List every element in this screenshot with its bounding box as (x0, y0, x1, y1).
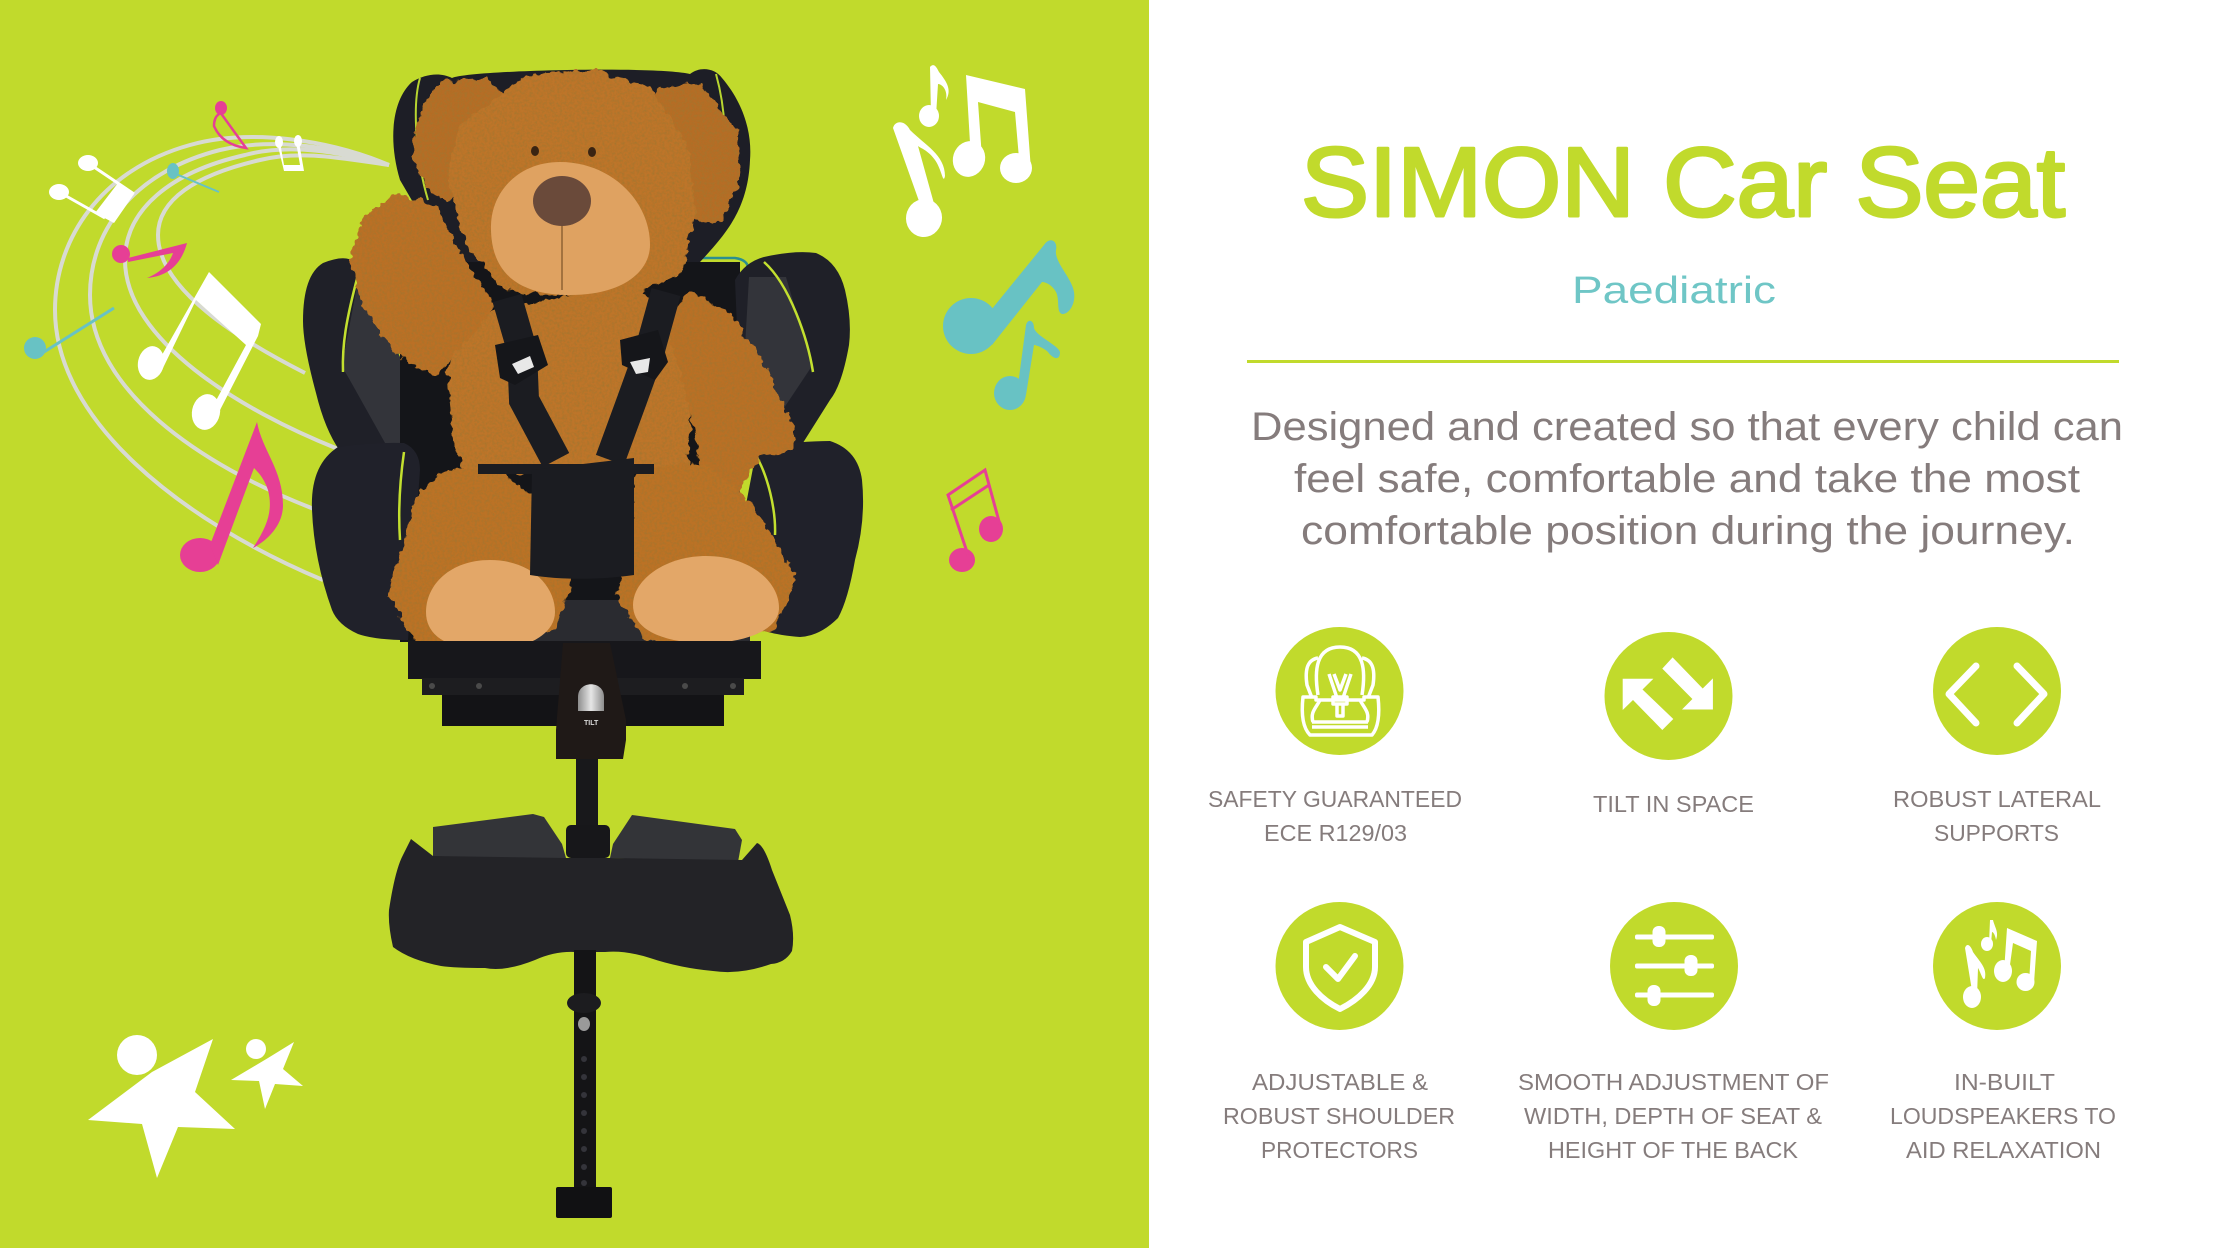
label (1518, 1069, 1829, 1163)
label: HEIGHT OF THE BACK (1548, 1137, 1799, 1163)
label: LOUDSPEAKERS TO (1890, 1103, 2116, 1129)
music notes: white top right (893, 65, 1032, 240)
feature: loudspeakers (1890, 902, 2116, 1163)
label: SAFETY GUARANTEED (1208, 786, 1462, 812)
note: large white beamed (135, 272, 261, 433)
note: tiny pink (214, 101, 246, 148)
seat: back centre (400, 262, 740, 642)
footplate with post (389, 759, 793, 1218)
label: AID RELAXATION (1906, 1137, 2101, 1163)
seat: base mesh (420, 600, 750, 645)
note: small pink (112, 243, 187, 278)
feature: smooth adjustment (1518, 902, 1829, 1163)
note: large pink (180, 422, 283, 572)
icon: music notes (1933, 902, 2061, 1030)
seat: strap loop (702, 258, 748, 276)
bear: muzzle (491, 162, 650, 295)
label: IN-BUILT (1954, 1069, 2055, 1095)
harness centre pad (530, 458, 634, 579)
music stave swoosh (55, 137, 389, 580)
bear: fur body and limbs (355, 75, 791, 650)
description paragraph (1251, 405, 2123, 553)
bear: right foot pad (633, 556, 779, 643)
feature: lateral supports (1893, 627, 2101, 846)
label: SUPPORTS (1934, 820, 2059, 846)
music notes on the stave (24, 101, 304, 572)
icon: tilt arrows (1604, 632, 1732, 760)
icon: sliders (1610, 902, 1738, 1030)
tilt knob (578, 684, 604, 711)
note: white beam pair (49, 155, 134, 223)
label: ADJUSTABLE & (1252, 1069, 1428, 1095)
feature: shoulder protectors (1223, 902, 1455, 1163)
bear: nose (533, 176, 591, 226)
label: ECE R129/03 (1264, 820, 1407, 846)
seat: right lower bolster (740, 441, 863, 637)
bear: left foot pad (426, 560, 555, 650)
icon: chevrons (1933, 627, 2061, 755)
seat: headrest (393, 69, 750, 300)
label: SMOOTH ADJUSTMENT OF (1518, 1069, 1829, 1095)
label: TILT IN SPACE (1593, 791, 1754, 817)
divider (1247, 360, 2119, 363)
lower post (574, 950, 596, 1195)
music note: pink outline pair (948, 470, 1003, 572)
post foot (556, 1187, 612, 1218)
description paragraph: feel safe, comfortable and take the most (1294, 457, 2080, 501)
bear: mouth line (561, 226, 563, 290)
seat: right wing (735, 252, 850, 446)
seat base and tilt mechanism (408, 641, 761, 759)
seat: left wing (303, 258, 389, 451)
logo: stars with heads (88, 1035, 303, 1178)
car seat and teddy bear (303, 69, 863, 650)
label (1223, 1069, 1455, 1163)
feature: safety guaranteed (1208, 627, 1462, 846)
label: PROTECTORS (1261, 1137, 1418, 1163)
seat: piping headrest (416, 74, 725, 200)
subtitle: Paediatric (1572, 270, 1776, 312)
title: SIMON Car Seat (1301, 127, 2065, 237)
harness straps (507, 292, 666, 460)
label: ROBUST LATERAL (1893, 786, 2101, 812)
label: ROBUST SHOULDER (1223, 1103, 1455, 1129)
note: tiny teal (167, 163, 219, 192)
label: WIDTH, DEPTH OF SEAT & (1524, 1103, 1822, 1129)
description paragraph: Designed and created so that every child can (1251, 405, 2123, 449)
label (1208, 786, 1462, 846)
tilt label: TILT (584, 720, 599, 727)
bear: eyes (531, 146, 596, 157)
music notes: teal right (943, 240, 1074, 410)
feature: tilt in space (1593, 632, 1754, 817)
label (1890, 1069, 2116, 1163)
panel: green background (0, 0, 1149, 1248)
seat: left lower bolster (312, 443, 420, 640)
footplate body (389, 839, 793, 972)
label (1893, 786, 2101, 846)
harness lap band (478, 464, 654, 474)
harness buckles (495, 330, 668, 385)
footplate pads (433, 814, 566, 858)
description paragraph: comfortable position during the journey. (1301, 509, 2075, 553)
icon: car seat (1276, 627, 1404, 755)
icon: shield (1276, 902, 1404, 1030)
note: tiny white (275, 135, 304, 171)
note: small teal (24, 308, 114, 359)
